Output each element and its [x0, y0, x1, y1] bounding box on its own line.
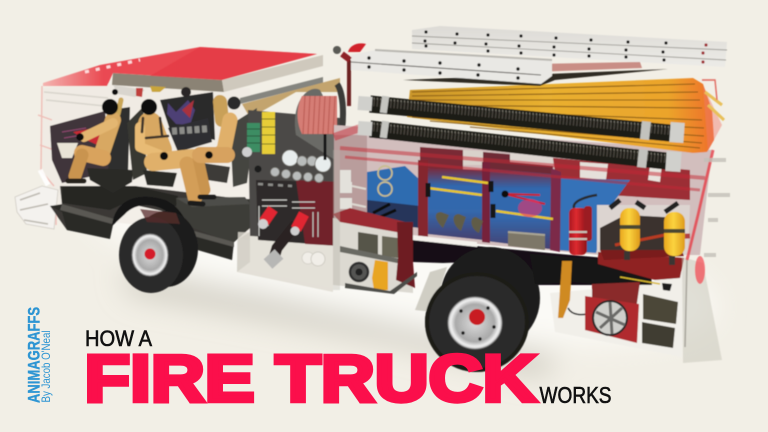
maroon wall [396, 222, 415, 288]
gauges [270, 150, 331, 182]
dashboard [50, 111, 110, 183]
rear clear panel and lights [682, 150, 730, 363]
cab rear wall [160, 92, 215, 140]
fire extinguisher [569, 195, 597, 255]
passenger firefighter center [140, 99, 214, 204]
fan [585, 282, 640, 343]
white sill [412, 235, 477, 247]
silver fittings [340, 170, 352, 209]
engine block [168, 118, 212, 152]
underbody dark gap [413, 240, 650, 285]
black bags [643, 294, 678, 324]
panel lower glass [237, 232, 333, 292]
upper ladder [412, 26, 727, 72]
hose bed [407, 78, 724, 153]
panel plate [248, 110, 340, 240]
rear rim [448, 297, 502, 349]
rear hub [469, 309, 485, 325]
rear tire front [425, 272, 529, 372]
cab glass shell [38, 84, 250, 240]
lower ladder [351, 50, 552, 84]
fire truck illustration [15, 26, 730, 372]
silver nozzle [268, 254, 279, 264]
blue equipment lockers [367, 160, 690, 255]
cones [436, 212, 449, 228]
red nozzles [264, 209, 273, 222]
driver firefighter [68, 89, 121, 181]
rear tire back [440, 247, 540, 349]
credit: Animagraffs [26, 307, 53, 403]
rear fender [415, 267, 447, 312]
ladder strap [568, 308, 590, 315]
seats [87, 107, 257, 193]
tire [134, 211, 198, 287]
side compartment left [333, 208, 417, 294]
maroon and white blocks under hoses [420, 147, 690, 200]
right rack [598, 200, 690, 280]
toolbox [508, 232, 545, 250]
body interior [334, 125, 712, 255]
yellow tool [372, 260, 388, 290]
chrome valve [242, 147, 252, 157]
white couplings [302, 252, 314, 264]
roof [43, 47, 317, 86]
discharge hose [274, 224, 296, 258]
storage bags [358, 232, 378, 255]
credit: Animagraffs: By Jacob O'Neal [39, 330, 53, 402]
hose reel [295, 84, 343, 160]
hose nozzle on mast [333, 43, 366, 106]
red glass haze bands [334, 126, 705, 190]
passenger firefighter right [200, 96, 240, 159]
couplings [350, 263, 368, 281]
roof underside [112, 55, 340, 118]
pump panel [242, 110, 340, 266]
shovel [620, 277, 660, 284]
rear cab step [187, 229, 234, 260]
heading: Fire Truck: FIRE TRUCK [84, 341, 537, 415]
rim [132, 234, 168, 276]
dark tarp [403, 69, 668, 86]
heading: How a: HOW A [85, 326, 152, 351]
front bumper and headlights [15, 170, 58, 229]
credit: Animagraffs: ANIMAGRAFFS [26, 307, 44, 403]
rear compartment [530, 254, 687, 357]
heading: Works: WORKS [540, 382, 612, 408]
front step [50, 204, 114, 239]
front wheel [119, 209, 198, 293]
small tools [373, 204, 396, 218]
rings [378, 166, 392, 180]
hose bundles [247, 123, 260, 152]
hub [144, 248, 156, 260]
deck and chassis [50, 186, 250, 260]
fender [112, 197, 190, 232]
valve levers [258, 184, 292, 186]
lower bay tools on blue lockers [340, 166, 553, 250]
upper suction hose [358, 98, 684, 134]
rear wheels [425, 247, 540, 372]
bolt cutters [505, 194, 545, 204]
lower suction hose [358, 123, 681, 162]
side glass left section [334, 135, 367, 225]
rear firefighter in blue [167, 87, 195, 125]
axes [442, 177, 488, 183]
floor shadow [73, 130, 727, 380]
air tanks [620, 208, 685, 265]
rope bag [558, 261, 572, 318]
clear side panels [237, 150, 340, 290]
